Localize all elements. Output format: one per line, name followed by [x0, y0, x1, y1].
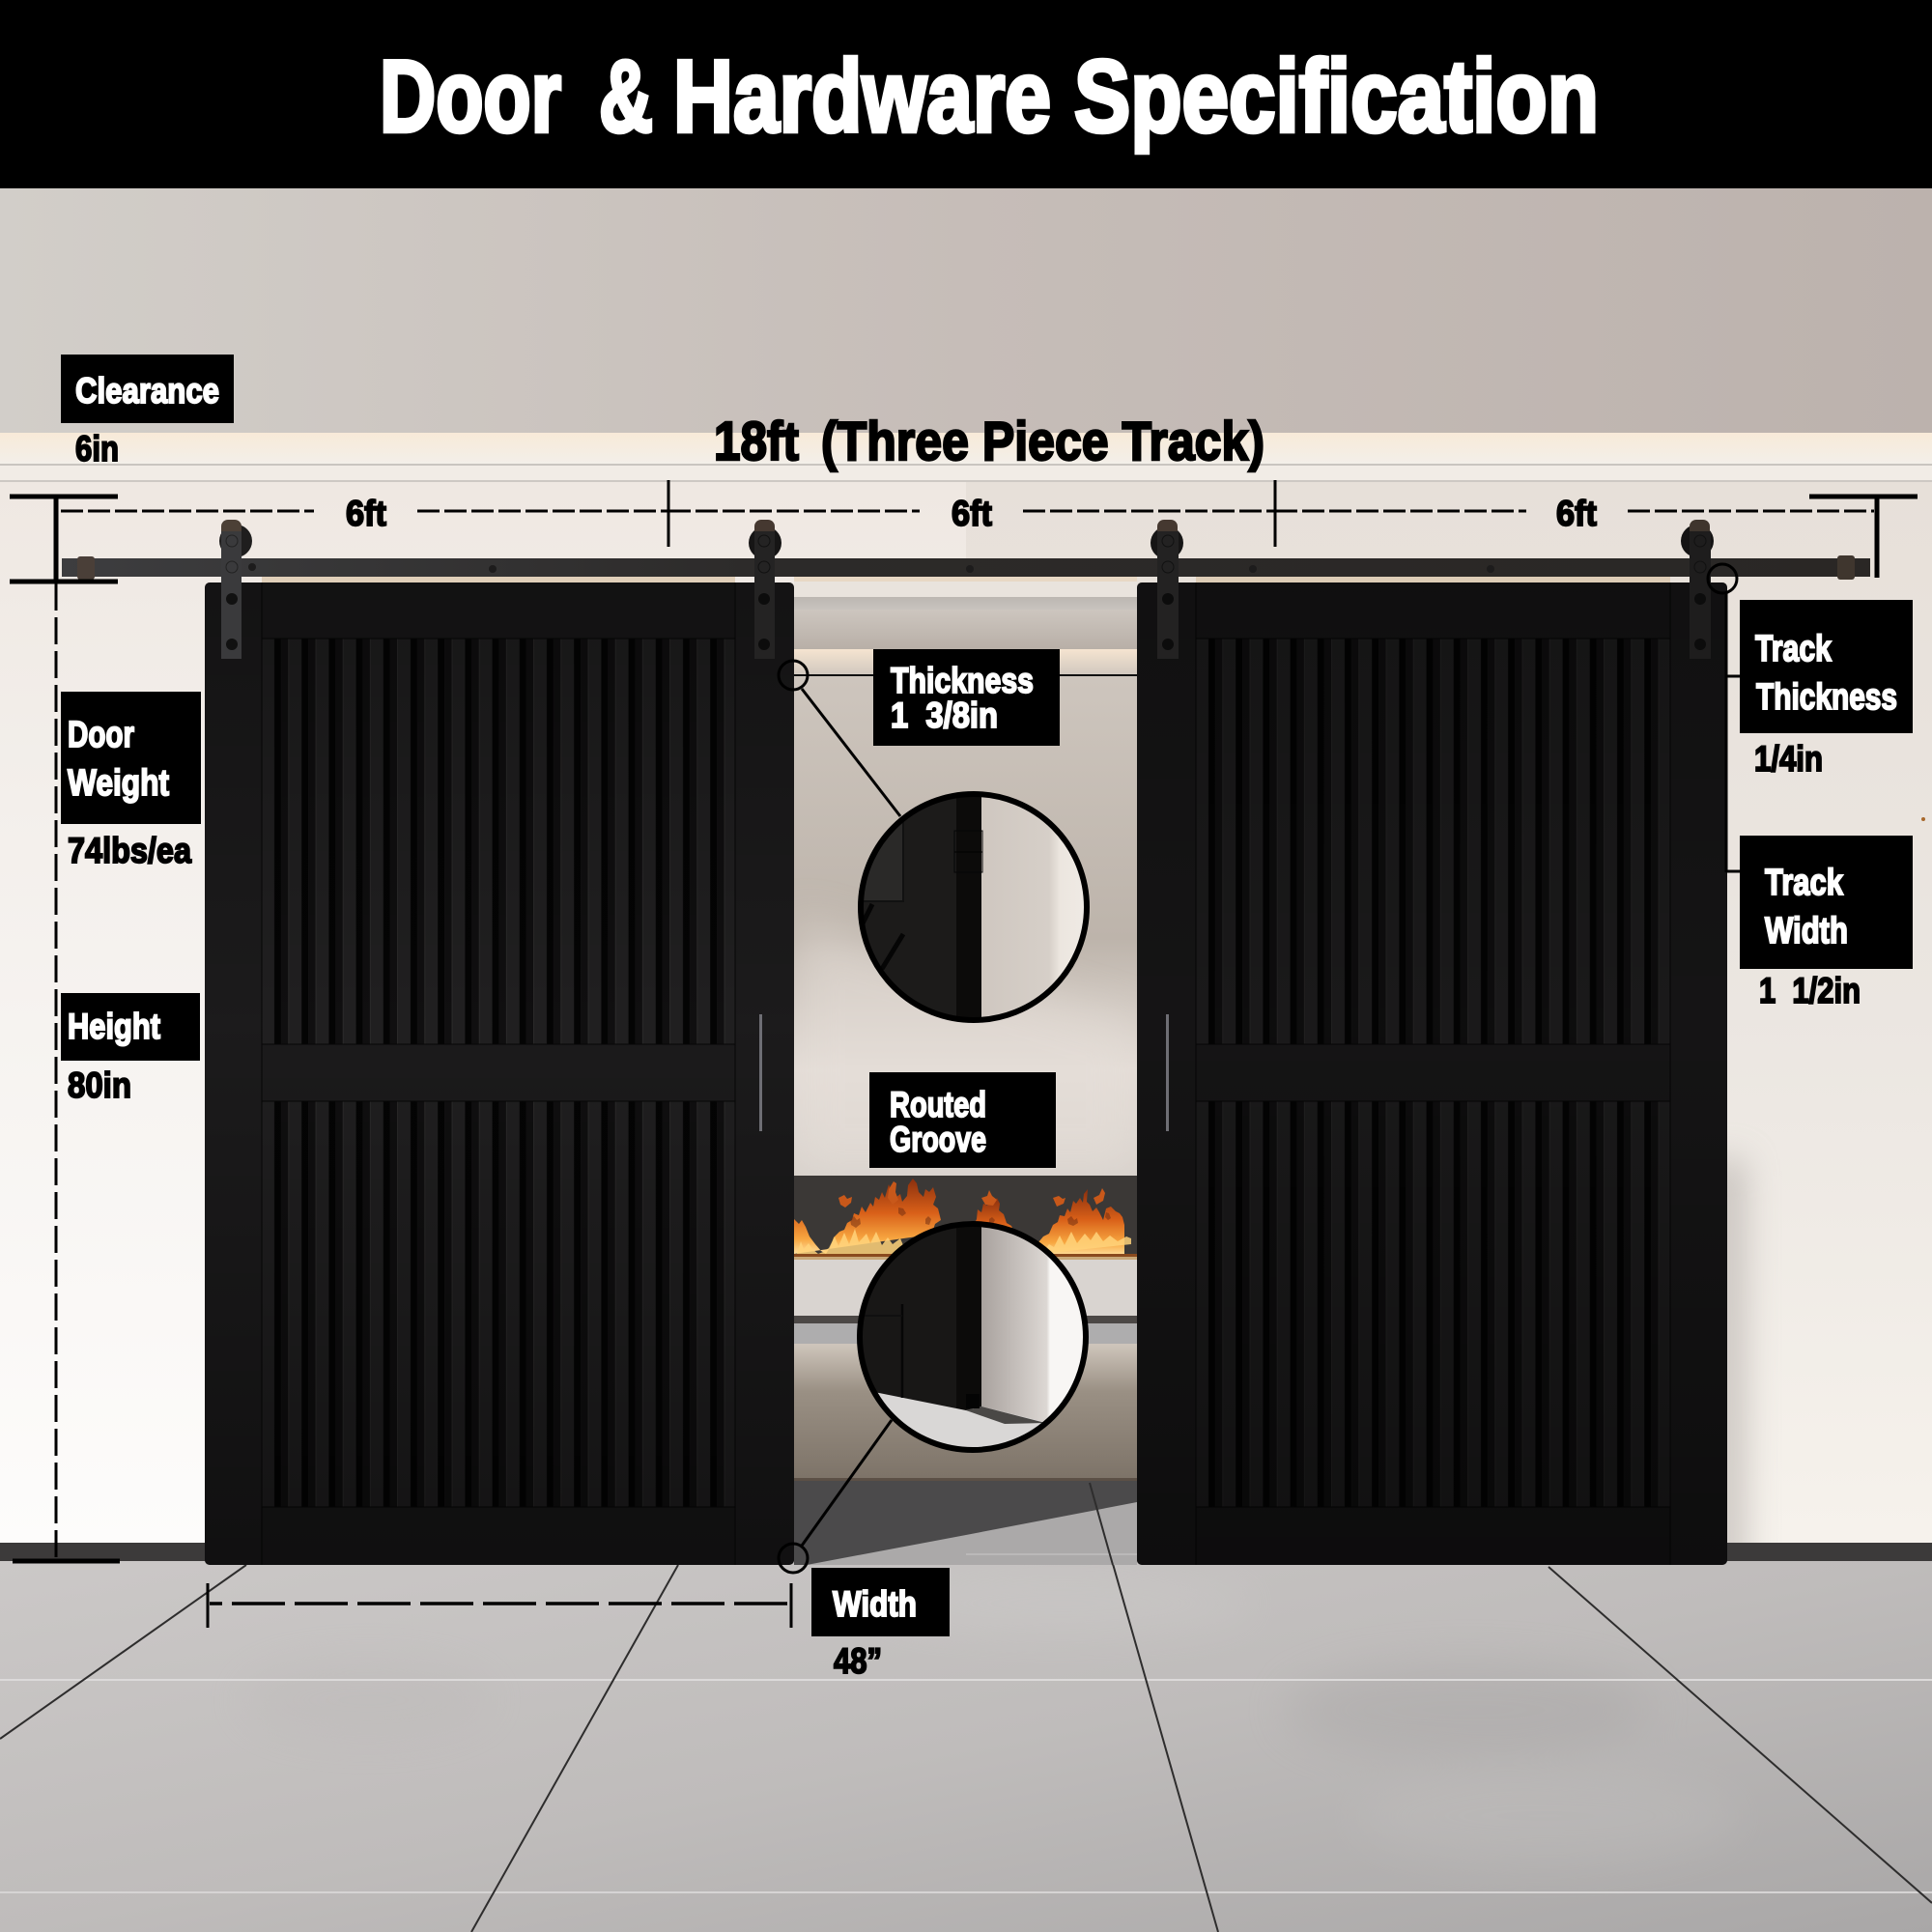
floor mottling	[242, 1575, 1739, 1864]
track thickness value: 1/4in	[1754, 739, 1823, 779]
clearance bracket right	[1809, 497, 1918, 578]
callout: door weight: Door	[68, 715, 134, 755]
opening between doors	[794, 582, 1137, 1565]
track thickness leader	[1708, 564, 1740, 872]
speck	[1921, 817, 1925, 821]
title: Door	[380, 40, 561, 154]
height value: 80in	[68, 1065, 131, 1105]
height dimension line	[13, 583, 120, 1561]
label: 6ft right: 6ft	[1556, 494, 1597, 533]
door width dimension line	[208, 1583, 791, 1628]
flames	[794, 1179, 1131, 1256]
groove leader	[779, 1420, 892, 1573]
handle	[1166, 1014, 1169, 1131]
callout: thickness: 1 3/8in	[891, 696, 998, 735]
flame wisps	[838, 1181, 1105, 1208]
callout: track width	[1740, 836, 1913, 1010]
wall shadow beside right door	[1710, 1159, 1744, 1584]
callout: routed groove: Routed	[890, 1085, 986, 1124]
slat panel upper	[1196, 639, 1670, 1044]
track dimension lines	[61, 480, 1874, 547]
title	[380, 40, 1599, 154]
slat panel lower	[1196, 1101, 1670, 1507]
door shading	[205, 582, 794, 1565]
flame dark gaps	[850, 1208, 1111, 1228]
track width value: 1 1/2in	[1759, 971, 1861, 1010]
cove light	[0, 433, 1932, 464]
callout: track thickness	[1740, 600, 1913, 779]
callout: track thickness: Track	[1755, 629, 1833, 669]
callout: height: Height	[68, 1007, 160, 1046]
left wall	[0, 482, 966, 1543]
rug	[794, 1344, 1137, 1480]
hanger 1	[219, 520, 252, 659]
door weight value: 74lbs/ea	[68, 831, 191, 870]
right door	[1137, 582, 1727, 1565]
callout: track thickness: Thickness	[1756, 677, 1897, 718]
ceiling	[0, 188, 1932, 433]
callout: track width: Track	[1765, 863, 1844, 903]
hanger straps	[219, 520, 1714, 659]
slat panel upper	[262, 639, 735, 1044]
floor	[0, 1561, 1932, 1932]
baseboard	[0, 1543, 1932, 1561]
callout: clearance: Clearance	[75, 371, 219, 411]
right wall	[966, 482, 1932, 1543]
rails	[1196, 582, 1670, 639]
header bar	[0, 0, 1932, 188]
callout: routed groove	[869, 1072, 1056, 1168]
handle	[759, 1014, 762, 1131]
slat panel lower	[262, 1101, 735, 1507]
callout: width	[811, 1568, 950, 1681]
title: Specification	[1074, 40, 1599, 154]
callout: clearance	[61, 355, 234, 469]
title: &	[599, 40, 653, 154]
title: Hardware	[673, 40, 1051, 154]
track length heading: (Three Piece Track)	[821, 411, 1264, 472]
clearance value: 6in	[75, 429, 119, 469]
door shading	[1137, 582, 1727, 1565]
callout: door weight: Weight	[68, 763, 169, 804]
fireplace band	[794, 1176, 1137, 1258]
left door	[205, 582, 794, 1565]
callout: track width: Width	[1765, 911, 1848, 952]
floor in opening	[794, 1481, 1137, 1565]
callout: thickness: Thickness	[891, 661, 1034, 700]
label: 6ft left: 6ft	[346, 494, 386, 533]
clearance bracket left	[10, 497, 118, 582]
width value: 48”	[834, 1641, 882, 1681]
callout: door weight	[61, 692, 201, 870]
hanger 4	[1681, 520, 1714, 659]
thickness leader	[779, 661, 1137, 816]
rails	[262, 582, 735, 639]
concrete hearth	[794, 1260, 1137, 1316]
door floor shadow	[205, 1563, 1727, 1567]
callout: width: Width	[833, 1584, 917, 1624]
barn door track	[62, 555, 1870, 582]
callout: thickness	[873, 649, 1060, 746]
callout: routed groove: Groove	[890, 1120, 986, 1159]
hanger 2	[749, 520, 781, 659]
hanger 3	[1151, 520, 1183, 659]
callout: height	[61, 993, 200, 1105]
magnifier: door thickness detail	[859, 792, 1091, 1024]
magnifier: routed groove detail	[859, 1222, 1091, 1459]
track length heading: 18ft	[714, 411, 799, 472]
label: 6ft centre: 6ft	[952, 494, 992, 533]
